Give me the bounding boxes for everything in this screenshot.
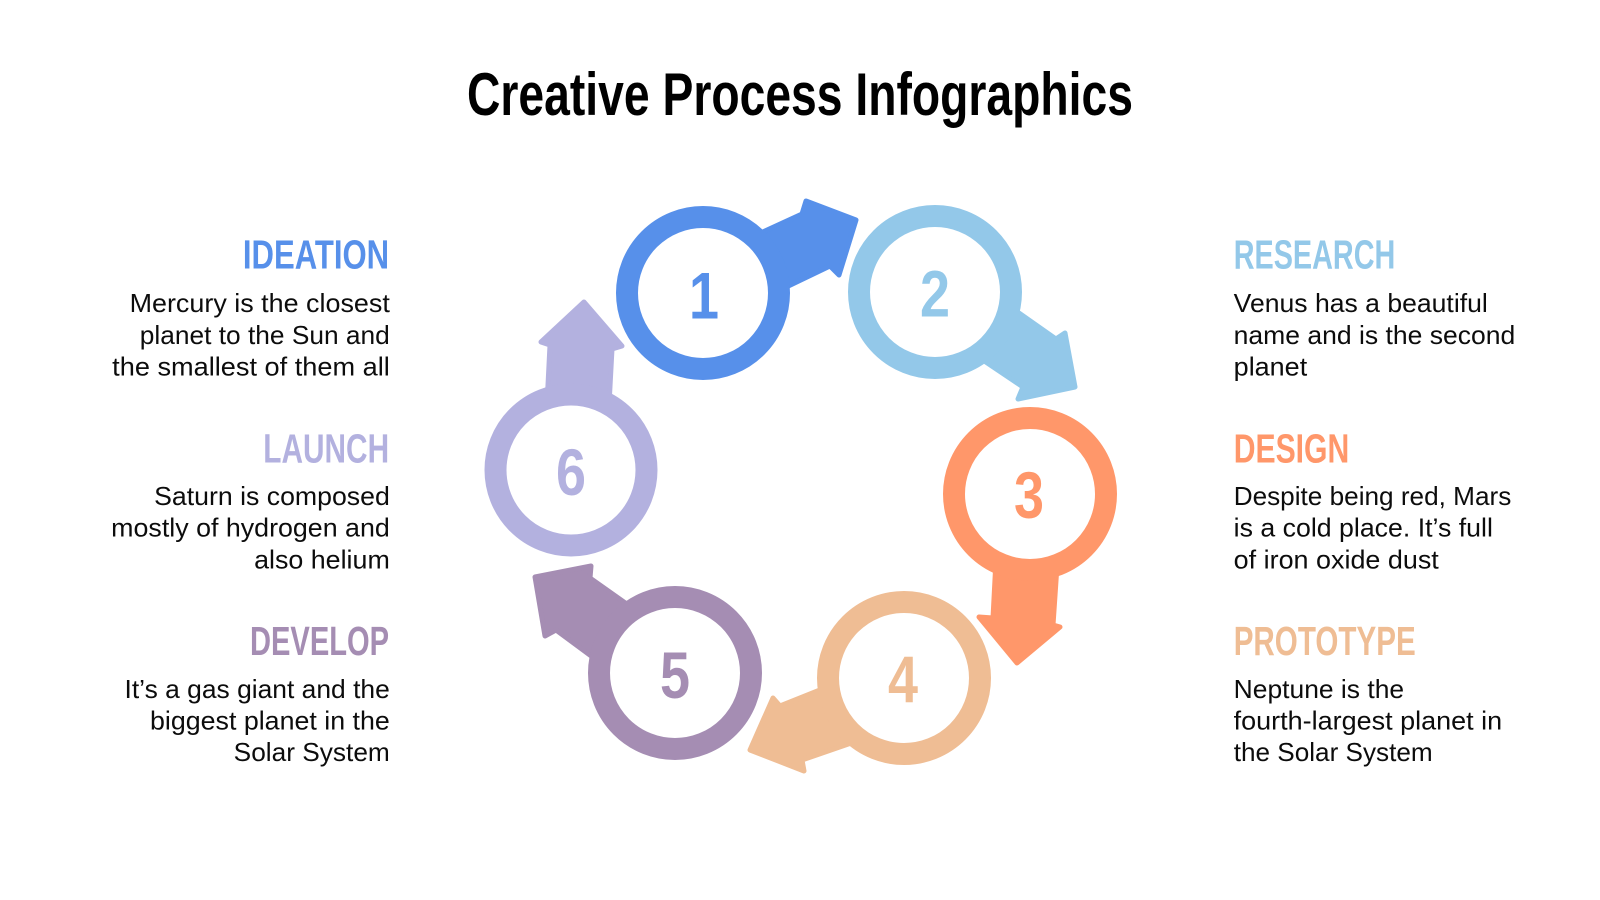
heading: develop: DEVELOP: [250, 618, 389, 664]
text block: develop description: Solar System: [234, 737, 390, 767]
step 4: peach ring with arrow: [750, 602, 980, 771]
text block: prototype description: the Solar System: [1234, 737, 1433, 767]
heading: ideation: IDEATION: [243, 232, 389, 278]
ring 2: [859, 216, 1011, 368]
number 4: 4: [888, 642, 918, 716]
step 1: blue ring with arrow: [627, 201, 856, 369]
arrow 5: [535, 566, 638, 664]
number 3: 3: [1014, 458, 1044, 532]
number 5: 5: [660, 638, 690, 712]
text block: research description: Venus has a beautiful: [1234, 288, 1488, 318]
heading: prototype: PROTOTYPE: [1234, 618, 1416, 664]
arrow 1: [752, 201, 856, 290]
text block: develop description: [124, 674, 390, 767]
panel: research text: [1234, 232, 1515, 382]
number 2: 2: [920, 256, 950, 330]
heading: launch: LAUNCH: [263, 425, 389, 471]
text block: ideation description: the smallest of them all: [112, 352, 390, 382]
heading: design: DESIGN: [1234, 425, 1349, 471]
panel: ideation text: [112, 232, 391, 382]
text block: ideation description: Mercury is the closest: [130, 288, 391, 318]
ring 6: [496, 394, 646, 546]
text block: launch description: also helium: [254, 544, 390, 574]
step 6: lavender ring with arrow: [496, 302, 646, 546]
text block: launch description: Saturn is composed: [154, 481, 390, 511]
number 1: 1: [689, 258, 719, 332]
text block: design description: of iron oxide dust: [1234, 544, 1440, 574]
panel: design text: [1234, 425, 1511, 574]
arrow 6: [541, 302, 622, 405]
panel: develop text: [124, 618, 390, 767]
step 3: orange ring with arrow: [954, 418, 1106, 663]
text block: research description: name and is the second: [1234, 320, 1515, 350]
text block: research description: planet: [1234, 352, 1308, 382]
arrow 3: [979, 560, 1060, 663]
text block: design description: [1234, 481, 1511, 574]
text block: prototype description: [1234, 674, 1502, 767]
text block: prototype description: Neptune is the: [1234, 674, 1404, 704]
arrow 2: [974, 306, 1075, 399]
text block: prototype description: fourth-largest planet in: [1234, 706, 1502, 736]
text block: ideation description: [112, 288, 391, 382]
step 5: purple ring with arrow: [535, 566, 751, 749]
panel: prototype text: [1234, 618, 1502, 767]
title: Creative Process Infographics: [467, 61, 1133, 128]
text block: develop description: It’s a gas giant and the: [124, 674, 390, 704]
panel: launch text: [111, 425, 390, 574]
text block: launch description: [111, 481, 390, 574]
number 6: 6: [556, 435, 586, 509]
text block: launch description: mostly of hydrogen and: [111, 513, 390, 543]
step 2: light blue ring with arrow: [859, 216, 1075, 399]
ring 5: [599, 597, 751, 749]
ring 3: [954, 418, 1106, 570]
text block: design description: is a cold place. It’s full: [1234, 513, 1493, 543]
text block: ideation description: planet to the Sun and: [140, 320, 390, 350]
ring 1: [627, 217, 779, 369]
text block: develop description: biggest planet in the: [150, 706, 390, 736]
text block: research description: [1234, 288, 1515, 382]
arrow 4: [750, 686, 857, 771]
ring 4: [828, 602, 980, 754]
heading: research: RESEARCH: [1234, 232, 1395, 278]
text block: design description: Despite being red, Mars: [1234, 481, 1511, 511]
